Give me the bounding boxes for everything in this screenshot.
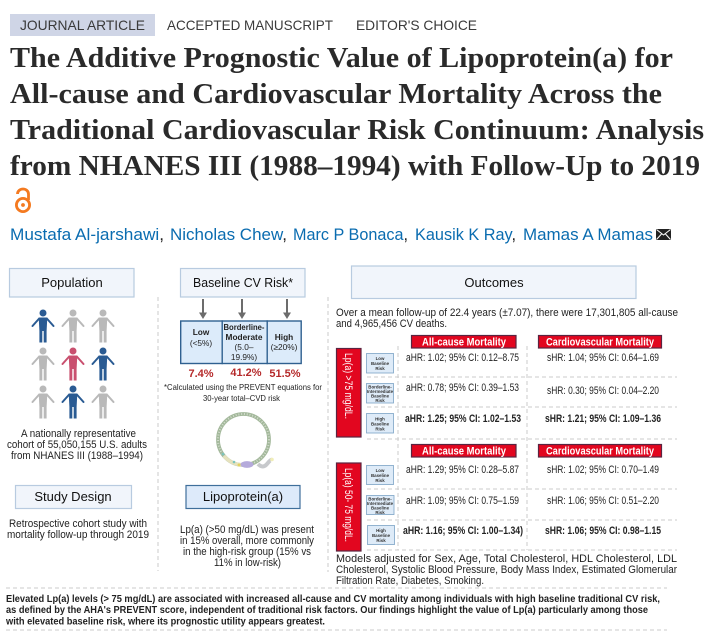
table: Lp(a) above 75 mg/dL [336, 336, 662, 437]
hazard ratios: aHR: 1.02; 95% CI: 0.12–8.75 [406, 352, 519, 364]
hazard ratios [405, 352, 661, 425]
icon: people grid [32, 310, 114, 418]
risk label: borderline: Borderline- [368, 384, 392, 390]
risk label: borderline: Baseline [371, 394, 390, 398]
risk box: high: High [275, 332, 293, 342]
authors: Nicholas Chew, [170, 225, 287, 244]
risk label: borderline: Risk [375, 398, 385, 403]
column header: all-cause mortality: All-cause Mortality [422, 446, 506, 458]
row label: Lp(a) 50-75: Lp(a) 50- 75 mg/dL. [342, 468, 354, 542]
authors: Mustafa Al-jarshawi, [10, 225, 164, 244]
title: The Additive Prognostic Value of Lipoprotein(a) for [10, 42, 673, 74]
authors: Mamas A Mamas [523, 225, 653, 244]
icon: lipoprotein ring [218, 414, 274, 468]
risk box: borderline-moderate [222, 321, 267, 364]
risk label: borderline [366, 384, 394, 403]
risk box: low: (<5%) [190, 338, 212, 348]
population text: from NHANES III (1988–1994) [11, 450, 143, 462]
article tags [10, 14, 477, 36]
risk label: low: Low [376, 468, 385, 473]
risk percentages: 51.5% [269, 368, 301, 380]
panel: baseline CV risk [164, 268, 322, 403]
row label: Lp(a) above 75 [336, 348, 361, 437]
hazard ratios [403, 464, 661, 537]
footnote [164, 382, 322, 403]
lipoprotein text: Lp(a) (>50 mg/dL) was present [180, 524, 314, 536]
heading: study design: Study Design [34, 489, 112, 504]
outcomes summary: and 4,965,456 CV deaths. [336, 318, 447, 330]
risk label: high: Risk [375, 426, 385, 432]
study design text: mortality follow-up through 2019 [7, 529, 149, 541]
risk percentages: 41.2% [230, 367, 262, 379]
heading: outcomes: Outcomes [464, 275, 524, 290]
column header: cardiovascular mortality: Cardiovascular Mortality [546, 446, 654, 458]
heading: baseline CV risk: Baseline CV Risk* [193, 275, 293, 290]
hazard ratios: sHR: 0.30; 95% CI: 0.04–2.20 [547, 385, 659, 397]
hazard ratios: aHR: 1.09; 95% CI: 0.75–1.59 [406, 495, 519, 507]
risk label: high: Baseline [371, 422, 390, 426]
risk label: low: Risk [375, 366, 385, 371]
article tags: ACCEPTED MANUSCRIPT [167, 17, 333, 33]
panel: lipoprotein(a) [180, 486, 315, 569]
risk label: low: Baseline [371, 361, 390, 366]
heading: lipoprotein(a): Lipoprotein(a) [203, 489, 283, 504]
row label: Lp(a) 50-75 [336, 463, 361, 551]
hazard ratios: aHR: 1.25; 95% CI: 1.02–1.53 [405, 413, 521, 425]
risk box: high: (≥20%) [271, 342, 298, 352]
title [10, 42, 704, 182]
lipoprotein text: 11% in low-risk) [214, 557, 281, 569]
risk box: borderline-moderate: (5.0– [235, 342, 254, 352]
outcomes summary [336, 307, 678, 330]
hazard ratios: sHR: 1.02; 95% CI: 0.70–1.49 [547, 464, 659, 476]
conclusion: as defined by the AHA's PREVENT score, independent of traditional risk factors. Our findings highlight the value of Lp(a) particularly among those [6, 605, 648, 616]
risk box: borderline-moderate: 19.9%) [231, 352, 257, 362]
column header: cardiovascular mortality: Cardiovascular Mortality [546, 336, 654, 348]
study design text [7, 518, 149, 541]
risk label: high [368, 526, 394, 544]
outcomes summary: Over a mean follow-up of 22.4 years (±7.07), there were 17,301,805 all-cause [336, 307, 678, 319]
hazard ratios: sHR: 1.04; 95% CI: 0.64–1.69 [547, 352, 659, 364]
risk box: borderline-moderate: Moderate [226, 332, 263, 342]
risk label: low [366, 466, 394, 484]
heading: baseline CV risk [180, 268, 305, 297]
arrows [199, 299, 291, 319]
risk label: low: Risk [375, 478, 385, 483]
icon: envelope [656, 229, 671, 240]
lipoprotein text: in 15% overall, more commonly [180, 535, 315, 547]
title: All-cause and Cardiovascular Mortality Across the [10, 78, 662, 110]
hazard ratios: sHR: 1.06; 95% CI: 0.51–2.20 [547, 495, 659, 507]
risk label: high [366, 414, 394, 433]
conclusion [5, 594, 660, 628]
risk box: low: Low [193, 327, 210, 337]
row label: Lp(a) above 75: Lp(a) >75 mg/dL. [342, 353, 354, 419]
model adjustment note: Models adjusted for Sex, Age, Total Cholesterol, HDL Cholesterol, LDL [336, 553, 677, 565]
authors: Kausik K Ray, [415, 225, 516, 244]
risk label: high: Risk [376, 538, 386, 543]
population text: cohort of 55,050,155 U.S. adults [7, 439, 148, 451]
footnote: *Calculated using the PREVENT equations for [164, 382, 322, 392]
hazard ratios: aHR: 1.16; 95% CI: 1.00–1.34) [403, 525, 523, 537]
risk label: high: Baseline [372, 533, 391, 538]
model adjustment note [336, 553, 677, 587]
risk label: borderline: Intermediate [367, 389, 394, 394]
hazard ratios: sHR: 1.21; 95% CI: 1.09–1.36 [545, 413, 661, 425]
table: Lp(a) 50-75 mg/dL [336, 444, 662, 551]
study design text: Retrospective cohort study with [9, 518, 147, 530]
lipoprotein text [180, 524, 315, 569]
article tags: JOURNAL ARTICLE [20, 17, 145, 33]
icon: open access [16, 189, 30, 212]
column header: all-cause mortality: All-cause Mortality [422, 336, 506, 348]
authors: Marc P Bonaca, [293, 225, 408, 244]
risk box: high [267, 321, 301, 364]
risk box: low [181, 321, 222, 364]
heading: outcomes [352, 266, 636, 298]
risk label: low: Baseline [371, 473, 390, 478]
risk percentages: 7.4% [188, 368, 214, 380]
population text [7, 428, 148, 462]
risk label: high: High [375, 416, 385, 422]
model adjustment note: Cholesterol, Systolic Blood Pressure, Body Mass Index, Estimated Glomerular [336, 564, 677, 576]
risk label: low [366, 354, 394, 373]
risk label: borderline: Borderline- [368, 496, 392, 502]
hazard ratios: sHR: 1.06; 95% CI: 0.98–1.15 [545, 525, 661, 537]
risk label: borderline: Baseline [371, 506, 390, 510]
heading: population [10, 268, 134, 297]
population text: A nationally representative [21, 428, 136, 440]
article tags: EDITOR'S CHOICE [356, 17, 477, 33]
hazard ratios: aHR: 1.29; 95% CI: 0.28–5.87 [406, 464, 519, 476]
risk box: borderline-moderate: Borderline- [224, 322, 265, 332]
panel: population [7, 268, 148, 462]
title: from NHANES III (1988–1994) with Follow-Up to 2019 [10, 150, 700, 182]
heading: population: Population [41, 275, 103, 290]
authors [10, 225, 653, 244]
panel: outcomes [336, 266, 678, 587]
panel: study design [7, 486, 149, 541]
title: Traditional Cardiovascular Risk Continuum: Analysis [10, 114, 704, 146]
heading: study design [16, 486, 132, 508]
model adjustment note: Filtration Rate, Diabetes, Smoking. [336, 575, 484, 587]
conclusion: with elevated baseline risk, where its prognostic utility appears greatest. [5, 616, 325, 628]
conclusion: Elevated Lp(a) levels (> 75 mg/dL) are associated with increased all-cause and CV mortality among individuals with high baseline traditional CV risk, [6, 594, 660, 605]
footnote: 30-year total–CVD risk [203, 393, 281, 403]
hazard ratios: aHR: 0.78; 95% CI: 0.39–1.53 [406, 382, 519, 394]
risk label: low: Low [376, 356, 385, 361]
risk label: borderline: Intermediate [367, 501, 394, 506]
risk label: high: High [376, 528, 386, 533]
risk label: borderline: Risk [375, 510, 385, 515]
risk label: borderline [366, 496, 394, 515]
risk percentages [188, 367, 301, 380]
lipoprotein text: in the high-risk group (15% vs [183, 546, 312, 558]
